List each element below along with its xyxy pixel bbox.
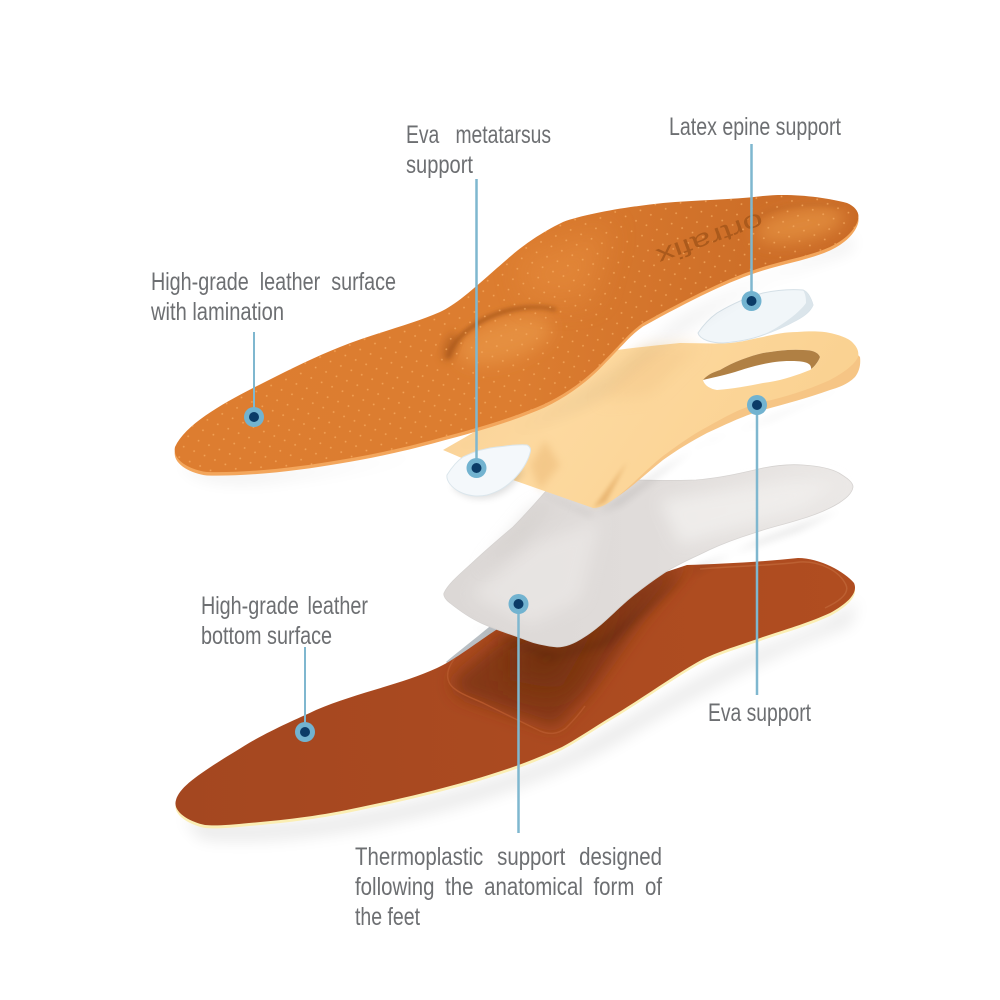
- foam layer body: [443, 331, 858, 508]
- grey layer body: [444, 465, 853, 647]
- label: High-grade leather bottom surface: [201, 592, 368, 650]
- perforation dots: [170, 190, 865, 480]
- callout: Latex epine support: [669, 113, 841, 311]
- foam layer shadow: [530, 385, 850, 516]
- grey layer highlights: [470, 520, 600, 625]
- arch highlight: [542, 248, 592, 290]
- bottom insole cream rim: [175, 561, 855, 828]
- label: High-grade leather bottom surface: bottom surface: [201, 622, 332, 650]
- top insole rim: [175, 198, 859, 476]
- label: High-grade leather surface with lamination: [150, 268, 396, 326]
- recessed pocket shading: [452, 560, 690, 728]
- label: Latex epine support: Latex epine support: [669, 113, 841, 141]
- callout: Thermoplastic support: [355, 594, 662, 931]
- heel rim line: [700, 562, 847, 608]
- label: High-grade leather surface with lamination: with lamination: [150, 298, 284, 326]
- Latex epine support (white oval pad): [698, 290, 813, 343]
- foam layer rim: [593, 340, 860, 508]
- top insole: leather surface with lamination: [170, 190, 865, 482]
- top insole shadow: [180, 235, 855, 482]
- label: Thermoplastic support designed following the anatomical form of the feet: Thermoplastic support designed: [355, 843, 662, 871]
- bottom insole: leather bottom surface: [175, 558, 858, 840]
- callout: High-grade leather surface: [150, 268, 396, 427]
- grey sliver behind insole: [446, 622, 505, 668]
- label: Thermoplastic support designed following the anatomical form of the feet: following the anatomical form of: [355, 873, 662, 901]
- label: Eva metatarsus support: support: [406, 151, 473, 179]
- grey layer shadow: [470, 510, 840, 660]
- label: High-grade leather surface with lamination: High-grade leather surface: [151, 268, 396, 296]
- bottom insole shadow: [182, 598, 858, 840]
- bottom insole body: [175, 558, 855, 825]
- label: Thermoplastic support designed following the anatomical form of the feet: the feet: [355, 903, 420, 931]
- callout: High-grade leather bottom surface: [201, 592, 368, 742]
- foam heel hole: [703, 350, 820, 390]
- foam crease: [593, 462, 627, 508]
- embossed logo: ortrafix: [653, 206, 767, 270]
- foam hole inner wall: [703, 350, 820, 380]
- label: Eva support: Eva support: [708, 699, 811, 727]
- label: Eva metatarsus support: [406, 121, 551, 179]
- metatarsal dome: [462, 315, 550, 364]
- label: Thermoplastic support designed following the anatomical form of the feet: [355, 843, 662, 931]
- callout: Eva metatarsus support: [406, 121, 551, 478]
- pocket outline: [448, 650, 585, 733]
- callout: Eva support: [708, 395, 811, 727]
- Eva support (foam layer): [443, 331, 860, 516]
- thermoplastic support (grey layer): [444, 465, 853, 660]
- label: High-grade leather bottom surface: High-grade leather: [201, 592, 368, 620]
- label: Eva metatarsus support: Eva metatarsus: [406, 121, 551, 149]
- top insole body: [175, 195, 859, 472]
- heel cup: [756, 204, 846, 247]
- metatarsus pad (white teardrop): [447, 445, 531, 498]
